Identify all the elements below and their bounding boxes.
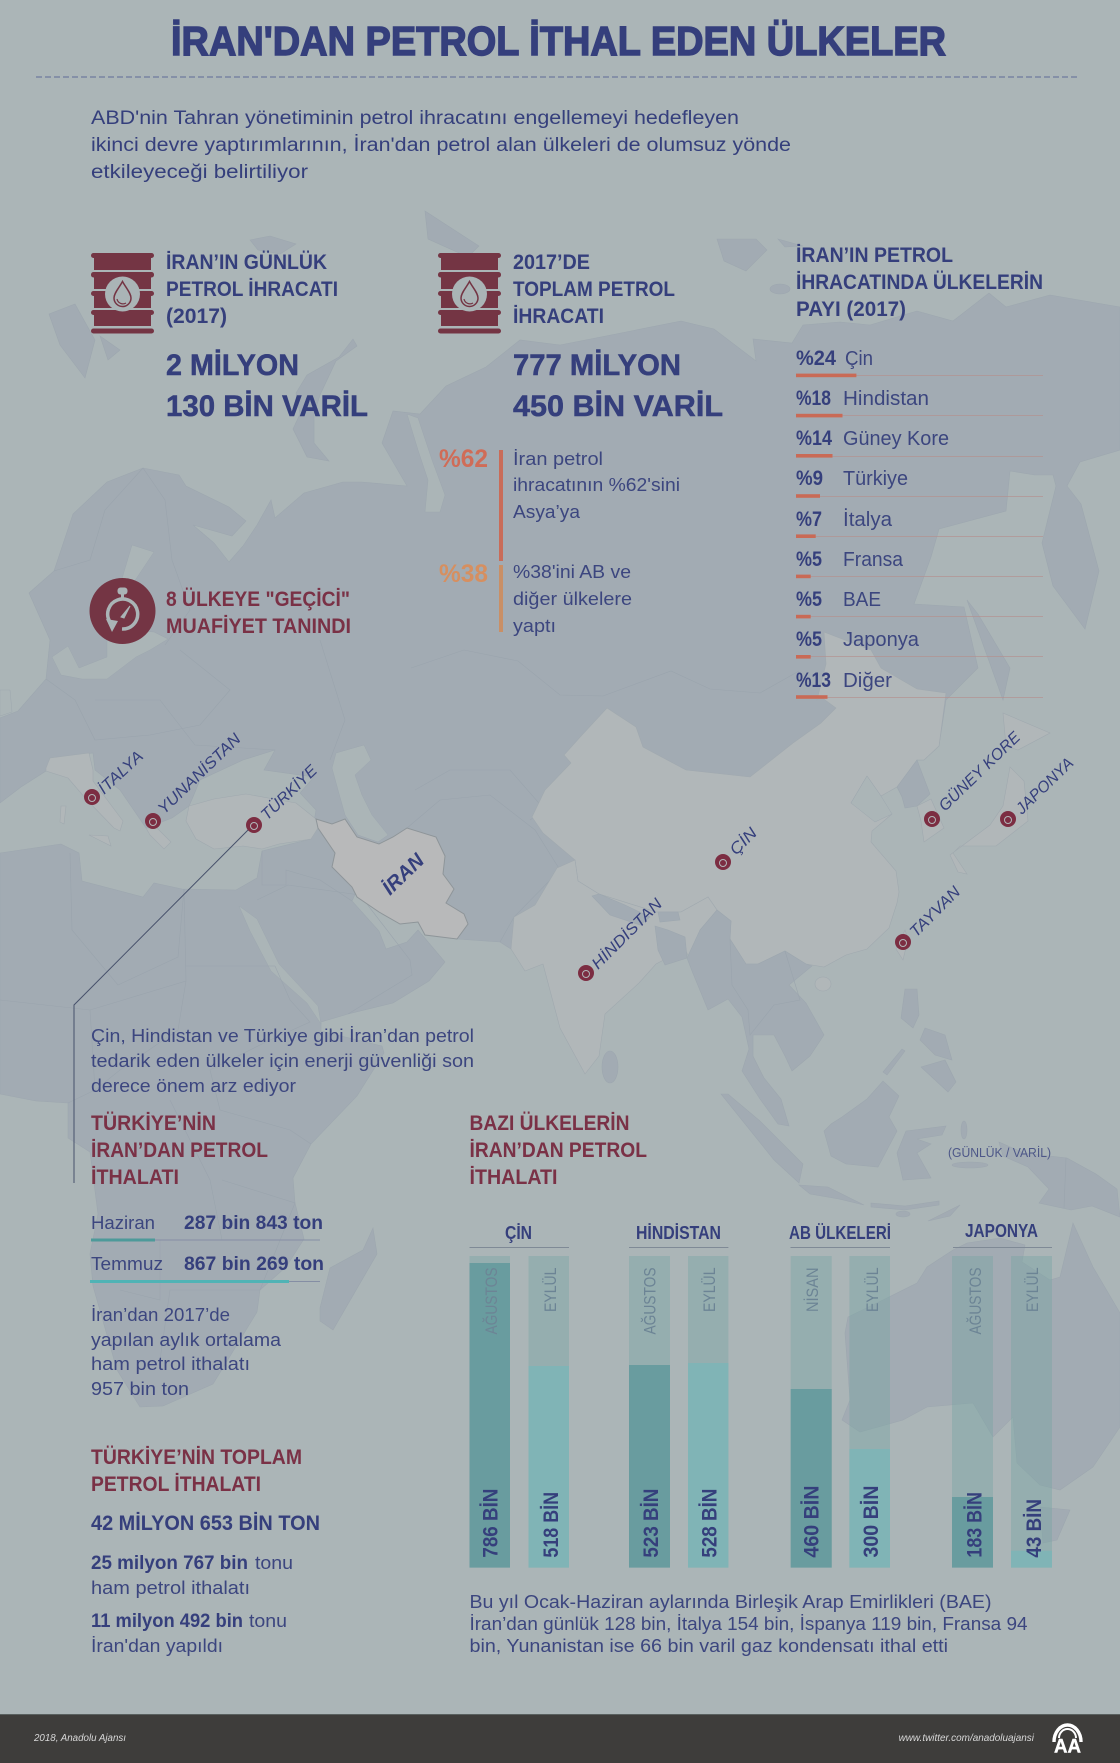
figure [513,349,723,423]
bar chart: shares: %5 [796,547,822,571]
text block: condensate: Bu yıl Ocak-Haziran aylarında Birleşik Arap Emirlikleri (BAE) [470,1591,992,1612]
panel: country shares [796,244,1043,699]
heading [470,1112,647,1189]
heading: (2017) [166,305,227,328]
callout: asia share [439,445,680,561]
callout: asia share: Asya’ya [513,502,581,522]
heading: PETROL İTHALATI [91,1473,261,1496]
text: monthly average: ham petrol ithalatı [91,1354,250,1374]
icon: oil barrel [438,253,501,334]
Türkiye on map [186,794,318,849]
arrow: leader line from Türkiye [74,825,253,1183]
heading: İTHALATI [470,1166,558,1189]
bar chart: monthly imports: Haziran [91,1213,155,1233]
heading [513,251,675,328]
bar chart: AB Ülkeleri: NİSAN [803,1268,822,1312]
intro text: etkileyeceği belirtiliyor [91,162,309,183]
bar chart: shares: %9 [796,466,823,490]
figure: 777 MİLYON [513,349,681,382]
bar chart: Çin: EYLÜL [542,1268,560,1312]
bar chart: monthly imports: 287 bin 843 ton [184,1213,323,1234]
icon: AA logo: AA [1054,1736,1081,1758]
bar chart: monthly imports: Temmuz [91,1254,163,1274]
heading: TÜRKİYE’NİN TOPLAM [91,1446,302,1469]
bar chart: monthly imports: 867 bin 269 ton [184,1254,324,1275]
callout: asia share: İran petrol [513,449,603,469]
text block: condensate: bin, Yunanistan ise 66 bin varil gaz kondensatı ithal etti [470,1635,948,1656]
bar chart: Çin: 786 BİN [480,1489,503,1558]
map markers and labels: HİNDİSTAN [587,894,666,973]
bar chart: monthly imports [90,1213,324,1283]
text block: energy security: derece önem arz ediyor [91,1076,296,1096]
text: monthly average: İran’dan 2017’de [91,1305,230,1325]
bar chart: shares: %5 [796,587,822,611]
text [166,588,351,638]
heading: İHRACATINDA ÜLKELERİN [796,271,1043,294]
icon: oil barrel [91,253,154,334]
twitter url: www.twitter.com/anadoluajansi [899,1732,1035,1744]
text block: condensate [470,1591,1028,1656]
bar chart: Çin [470,1223,569,1568]
figure: 130 BİN VARİL [166,390,368,423]
heading [91,1446,302,1496]
heading: TÜRKİYE’NİN [91,1112,216,1135]
callout: EU share: %38'ini AB ve [513,562,631,582]
bar chart: Hindistan: 523 BİN [640,1489,663,1558]
text block: condensate: İran’dan günlük 128 bin, İtalya 154 bin, İspanya 119 bin, Fransa 94 [470,1613,1028,1634]
heading: İRAN’DAN PETROL [470,1139,647,1162]
bar chart: Japonya: JAPONYA [965,1221,1038,1241]
İran on map [316,819,468,939]
bar chart: Çin: 518 BİN [540,1492,563,1558]
callout: asia share: ihracatının %62'sini [513,475,680,495]
text: 8 ÜLKEYE "GEÇİCİ" [166,588,350,611]
footer bar [0,1714,1120,1763]
bar chart: shares: Hindistan [843,388,929,410]
map markers and labels: TAYVAN [907,883,964,941]
panel: daily export [91,251,368,423]
figure [166,349,368,423]
bar chart: shares [796,346,1043,699]
figure: 450 BİN VARİL [513,390,723,423]
bar chart: Çin: ÇİN [505,1223,532,1243]
map markers and labels: GÜNEY KORE [935,728,1024,815]
map markers and labels: JAPONYA [1012,755,1077,819]
intro text: ABD'nin Tahran yönetiminin petrol ihracatını engellemeyi hedefleyen [91,108,739,129]
details: tonu [255,1553,293,1573]
unit note: (GÜNLÜK / VARİL) [948,1145,1051,1160]
callout: EU share [439,560,632,636]
bar chart: shares: BAE [843,589,881,611]
heading: PAYI (2017) [796,298,906,321]
figure: 42 MİLYON 653 BİN TON [91,1512,320,1535]
heading: 2017’DE [513,251,590,274]
bar chart: AB Ülkeleri: EYLÜL [864,1268,882,1312]
text block: energy security [91,1026,474,1096]
bar chart: Japonya: 43 BİN [1023,1499,1046,1558]
heading: İRAN’IN PETROL [796,244,953,267]
text block: energy security: tedarik eden ülkeler için enerji güvenliği son [91,1051,474,1071]
bar chart: shares: Güney Kore [843,428,949,450]
heading: BAZI ÜLKELERİN [470,1112,630,1135]
text: MUAFİYET TANINDI [166,615,351,638]
bar chart: Hindistan: EYLÜL [701,1268,719,1312]
bar chart: Japonya: 183 BİN [964,1492,987,1558]
map markers and labels: İRAN [377,849,429,900]
intro text: ikinci devre yaptırımlarının, İran'dan petrol alan ülkeleri de olumsuz yönde [91,135,791,156]
bar chart: AB Ülkeleri: 460 BİN [800,1486,824,1558]
heading: TOPLAM PETROL [513,278,675,301]
bar chart: shares: %18 [796,386,831,410]
bar chart: shares: %5 [796,627,822,651]
background world map [0,211,1120,1543]
panel: selected countries imports [470,1112,1052,1568]
bar chart: shares: Japonya [843,629,920,651]
bar chart: Japonya: AĞUSTOS [966,1268,985,1334]
icon: stopwatch [90,578,156,644]
bar chart: shares: %14 [796,426,832,450]
bar chart: Hindistan: 528 BİN [699,1489,722,1558]
bar chart: shares: Fransa [843,549,904,571]
callout: EU share: diğer ülkelere [513,589,632,609]
map markers and labels: YUNANİSTAN [154,729,245,818]
map markers and labels [84,728,1077,981]
icon: AA logo [1054,1725,1081,1758]
details [91,1553,293,1656]
bar chart: Japonya: EYLÜL [1024,1268,1042,1312]
map markers and labels: İTALYA [94,747,147,798]
bar chart: shares: Türkiye [843,468,908,490]
heading: İRAN’DAN PETROL [91,1139,268,1162]
bar chart: shares: Diğer [843,670,892,692]
bar chart: AB Ülkeleri: AB ÜLKELERİ [789,1223,891,1243]
title: İRAN'DAN PETROL İTHAL EDEN ÜLKELER [171,18,946,64]
callout: asia share: %62 [439,445,488,473]
heading: İTHALATI [91,1166,179,1189]
intro text [91,108,791,183]
details: İran'dan yapıldı [91,1636,223,1656]
heading: PETROL İHRACATI [166,278,338,301]
text: monthly average: 957 bin ton [91,1379,189,1399]
bar chart: shares: %7 [796,507,822,531]
bar chart: shares: Çin [845,348,873,370]
text: monthly average [91,1305,282,1399]
details: ham petrol ithalatı [91,1578,250,1598]
heading: İHRACATI [513,305,604,328]
heading [796,244,1043,321]
map markers and labels: ÇİN [725,823,761,859]
panel: Türkiye imports from Iran [90,1112,324,1399]
credit: 2018, Anadolu Ajansı [33,1733,126,1744]
panel: Türkiye total imports [91,1446,320,1656]
figure: 2 MİLYON [166,349,299,382]
bar chart: Hindistan: HİNDİSTAN [636,1223,721,1243]
bar chart: Hindistan [629,1223,728,1568]
bar chart: Hindistan: AĞUSTOS [640,1268,660,1334]
callout: EU share: yaptı [513,616,556,636]
exemption note [90,578,351,644]
map markers and labels: TÜRKİYE [257,761,321,824]
bar chart: Japonya [952,1221,1052,1568]
bar chart: shares: %13 [796,668,831,692]
details: 11 milyon 492 bin [91,1611,243,1632]
callout: EU share: %38 [439,560,488,588]
heading: İRAN’IN GÜNLÜK [166,251,327,274]
bar chart: shares: İtalya [843,508,893,531]
bar chart: AB Ülkeleri [789,1223,891,1568]
bar chart: AB Ülkeleri: 300 BİN [860,1486,883,1558]
bar chart: Çin: AĞUSTOS [482,1268,501,1334]
details: 25 milyon 767 bin [91,1553,248,1574]
panel: total export [438,251,723,423]
bar chart: shares: %24 [796,346,836,370]
details: tonu [249,1611,287,1631]
text: monthly average: yapılan aylık ortalama [91,1330,282,1350]
heading [166,251,338,328]
text block: energy security: Çin, Hindistan ve Türkiye gibi İran’dan petrol [91,1026,474,1046]
heading [91,1112,268,1189]
